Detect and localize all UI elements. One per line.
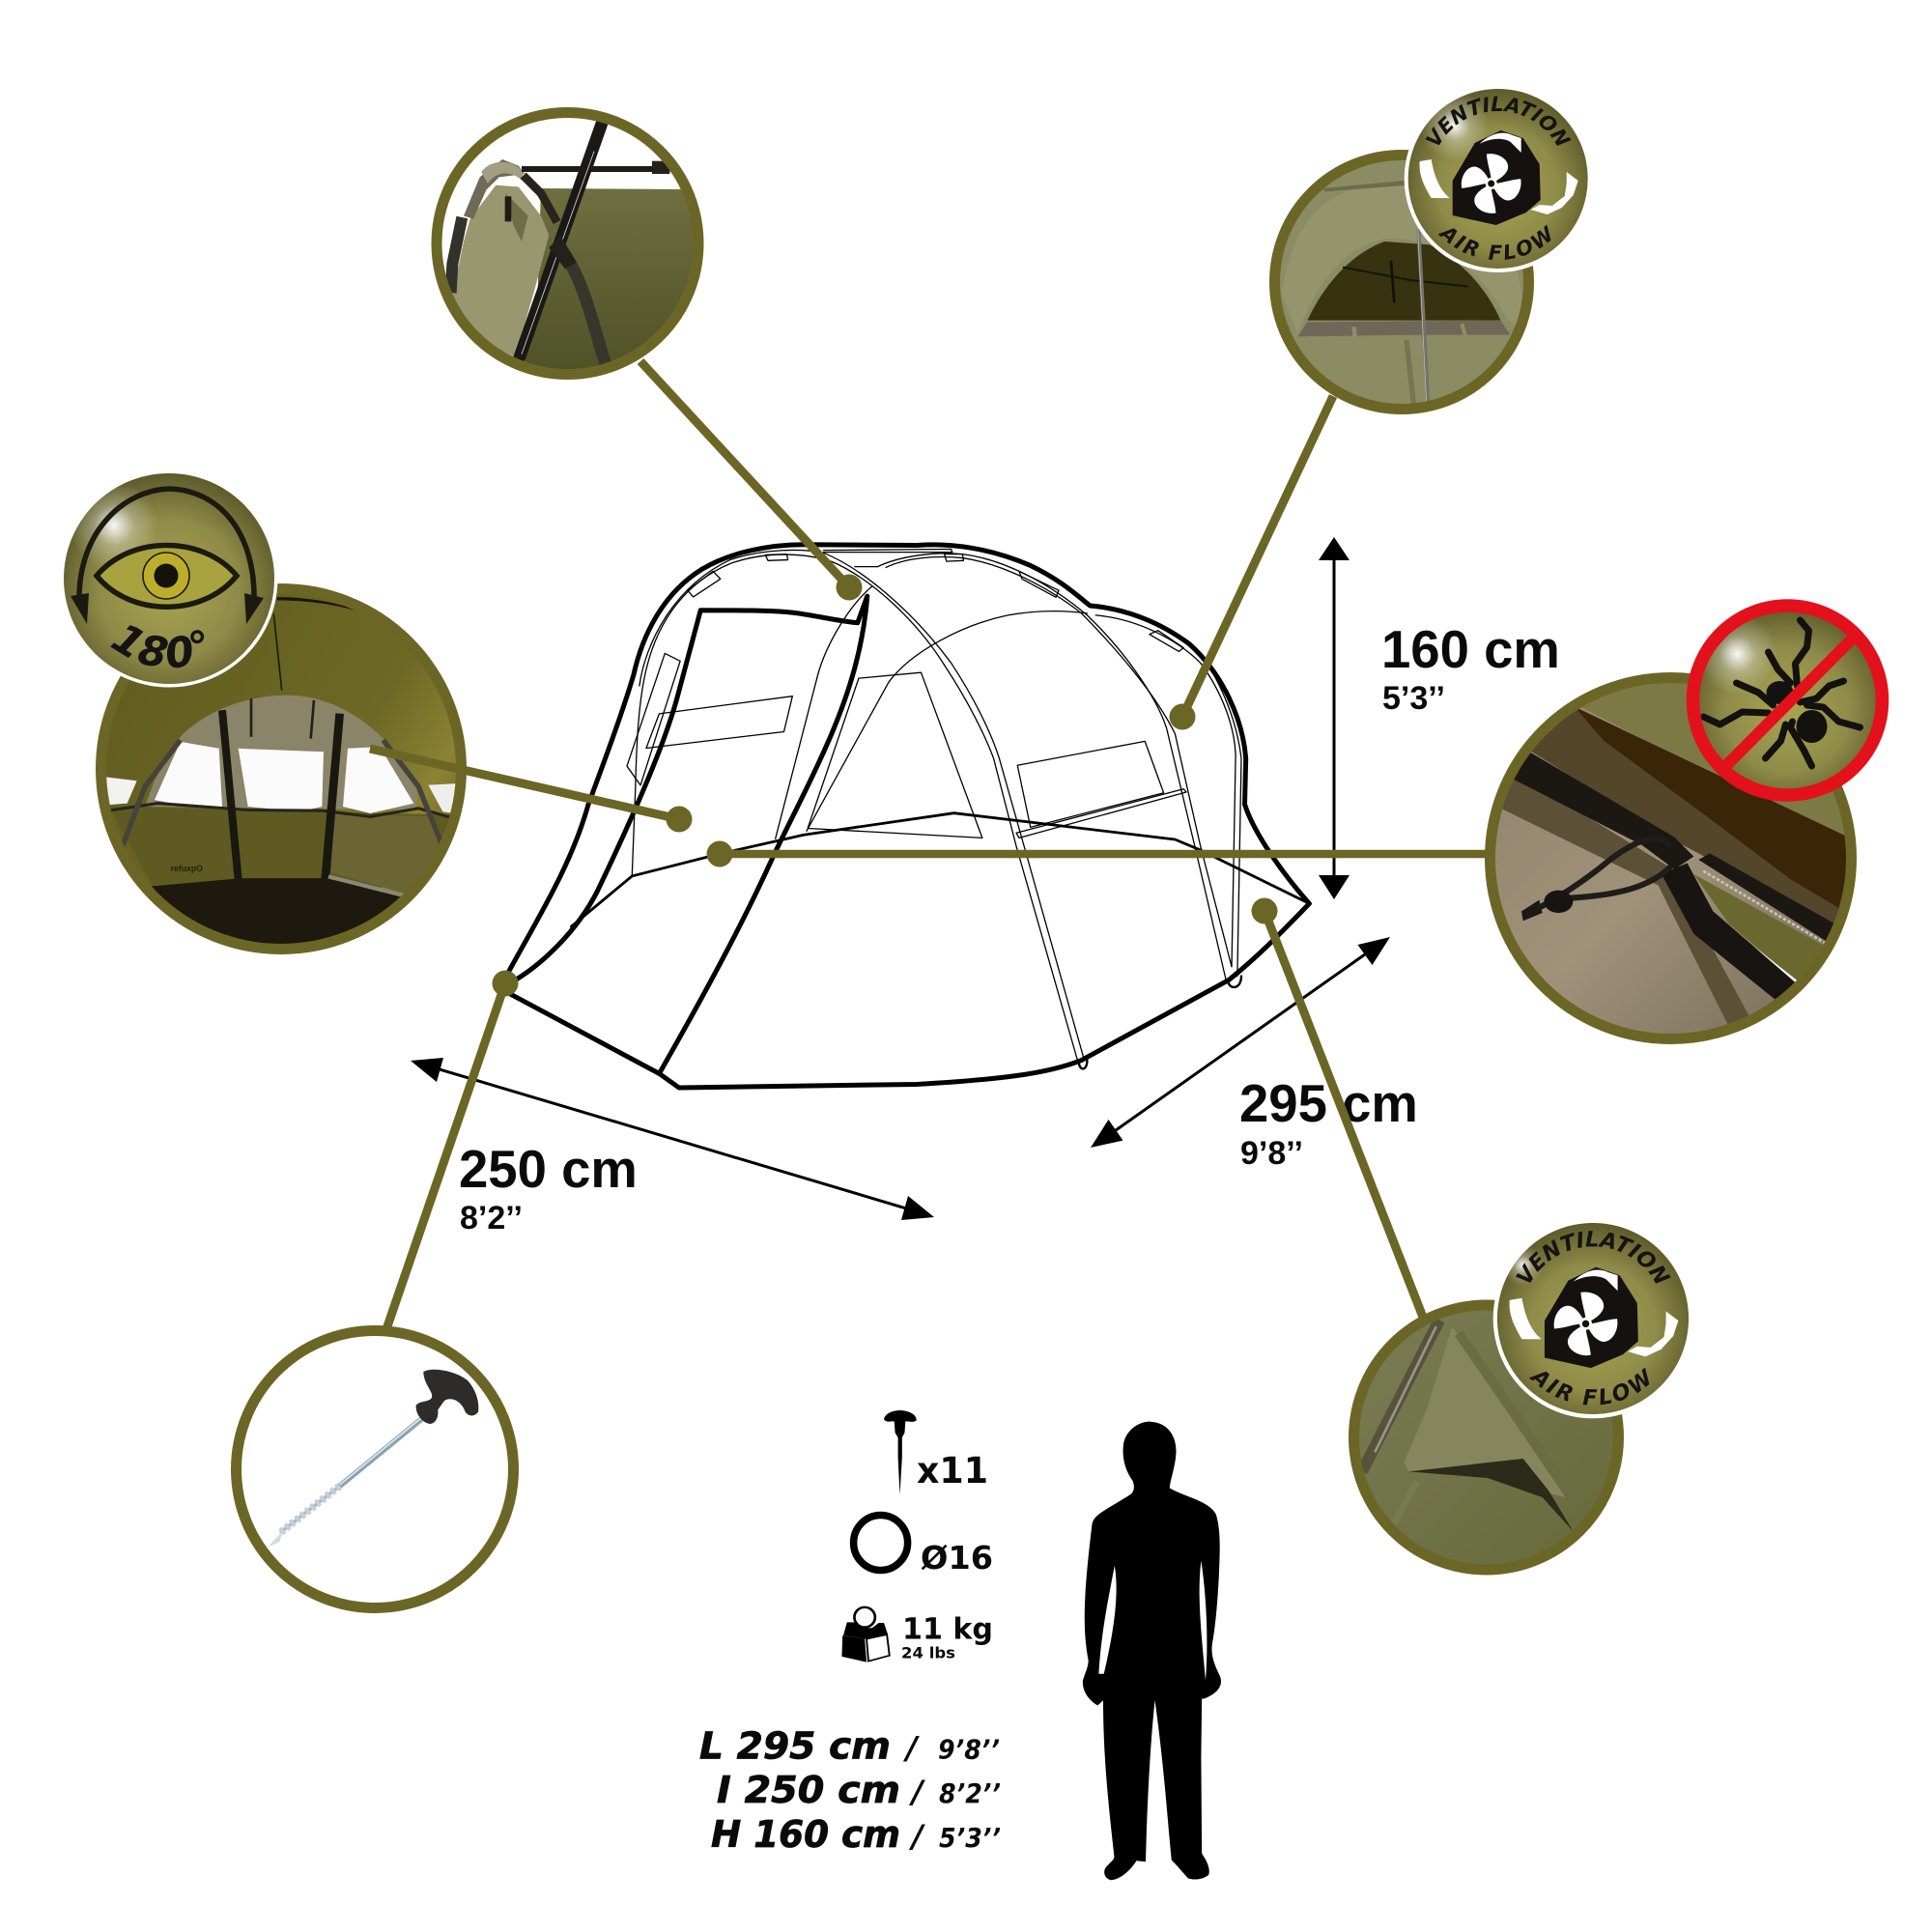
line: length: / <box>902 1729 920 1766</box>
tent poles and panels <box>627 549 1241 1068</box>
dimension: 250 cm width <box>411 1058 934 1236</box>
label: air flow: AIR FLOW <box>1437 224 1551 260</box>
icon: fan <box>1420 130 1578 225</box>
connector: storm vent <box>1252 898 1424 1320</box>
connector: panoramic windows <box>370 749 692 833</box>
icon: pole diameter ring <box>854 1515 908 1571</box>
label: 8'2": 8’2’’ <box>460 1200 523 1236</box>
line: width <box>717 1769 1001 1811</box>
icon: eye <box>97 545 237 607</box>
icon: prohibition sign <box>1692 606 1882 795</box>
badge: ventilation air flow (bottom) <box>1493 1223 1689 1418</box>
connector lines and dots <box>370 361 1488 1329</box>
icon: fan <box>1510 1267 1678 1368</box>
icon: spider <box>1704 620 1861 766</box>
tent base seam <box>571 813 1309 926</box>
badge: 180 degree view <box>64 473 278 688</box>
dimension: 295 cm length <box>1091 937 1418 1172</box>
line: width: / <box>908 1774 925 1810</box>
panel: panoramic windows photo: refuxpO <box>171 864 203 873</box>
arrow: height <box>1319 537 1350 899</box>
badge: no insects <box>1692 606 1882 795</box>
label: x11: x11 <box>917 1450 988 1492</box>
dimension: 160 cm height <box>1319 537 1560 899</box>
connector: pole junction <box>640 361 862 601</box>
label: 180 degrees <box>110 625 205 668</box>
label: 180 degrees: 180° <box>110 625 205 668</box>
panel: zipper photo <box>1485 672 1857 1044</box>
label: ventilation: VENTILATION <box>1516 1231 1671 1284</box>
connector: ground peg <box>386 970 518 1329</box>
line: height: 5’3’’ <box>939 1822 1001 1854</box>
tent door panel <box>509 596 867 1073</box>
label: 160 cm: 160 cm <box>1381 620 1560 679</box>
line: length <box>699 1725 1000 1768</box>
arrow: width <box>411 1058 934 1220</box>
line: width: 8’2’’ <box>939 1777 1001 1809</box>
panel: pole junction photo <box>431 107 703 380</box>
panel: ventilation window photo <box>1269 150 1534 414</box>
panel: ground peg photo <box>236 1331 514 1607</box>
label: air flow: AIR FLOW <box>1529 1368 1650 1405</box>
tent line drawing <box>506 545 1309 1088</box>
tent outer outline <box>506 545 1309 1088</box>
icon: peg count <box>884 1410 917 1494</box>
icon: weight <box>841 1607 890 1662</box>
panel: panoramic windows photo <box>96 583 467 954</box>
line: height <box>711 1813 1001 1856</box>
line: length: 9’8’’ <box>938 1733 1000 1766</box>
label: 5'3": 5’3’’ <box>1382 680 1445 717</box>
line: height: H 160 cm <box>711 1813 900 1856</box>
connector: top ventilation <box>1169 396 1333 730</box>
line: height: / <box>908 1818 925 1855</box>
connector: zipper <box>707 840 1488 867</box>
icon: arc arrow <box>71 489 264 624</box>
arrow: length <box>1091 937 1390 1148</box>
text block: dimensions list <box>699 1725 1001 1856</box>
line: length: L 295 cm <box>699 1725 891 1768</box>
label: 11 kg: 11 kg <box>902 1613 993 1646</box>
line: width: I 250 cm <box>717 1769 900 1811</box>
label: 295 cm: 295 cm <box>1239 1074 1418 1133</box>
label: 24 lbs: 24 lbs <box>901 1644 955 1662</box>
label: ventilation: VENTILATION <box>1426 97 1571 146</box>
panel: storm vent photo <box>1343 1297 1633 1587</box>
icon: human silhouette for scale <box>1083 1422 1221 1880</box>
label: 9'8": 9’8’’ <box>1240 1135 1303 1172</box>
label: 250 cm: 250 cm <box>459 1140 638 1199</box>
badge: ventilation air flow (top) <box>1405 89 1588 272</box>
label: diameter 16: Ø16 <box>921 1539 993 1577</box>
